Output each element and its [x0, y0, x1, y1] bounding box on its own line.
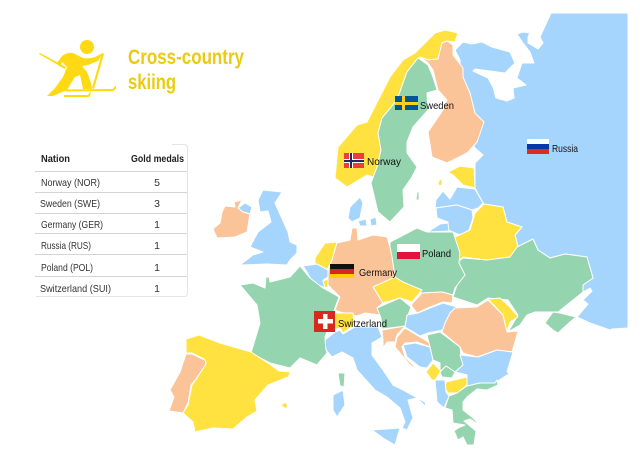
Luxembourg: [323, 279, 328, 288]
white band behind Switzerland label: [353, 316, 383, 327]
table rows: 5: [154, 177, 160, 189]
flag and label: Sweden: [395, 96, 454, 112]
Zealand: [370, 217, 377, 226]
Belarus: [455, 204, 522, 262]
table header: Gold medals: [131, 154, 184, 165]
title: Cross-country: [128, 46, 244, 69]
flag and label: Sweden: Sweden: [420, 100, 454, 112]
Estonia: [448, 166, 475, 188]
table rows: Sweden (SWE): [40, 198, 100, 210]
Switzerland: [330, 313, 354, 333]
Kaliningrad: [428, 223, 449, 232]
Portugal: [169, 354, 206, 413]
Kosovo: [440, 366, 455, 378]
flag and label: Switzerland: Switzerland: [338, 318, 387, 330]
Montenegro: [426, 363, 441, 380]
table rows: Poland (POL): [41, 262, 93, 274]
flag and label: Russia: [527, 139, 578, 155]
Sardinia: [333, 390, 345, 417]
flag and label: Poland: [397, 244, 451, 260]
Greece: [445, 380, 498, 445]
Slovenia: [382, 326, 405, 348]
table panel shadow: [36, 144, 188, 296]
Ireland: [213, 200, 250, 238]
Northern Ireland: [238, 203, 252, 214]
flag and label: Switzerland: [314, 311, 387, 332]
Spain: [183, 335, 291, 432]
flag and label: Germany: Germany: [359, 267, 398, 279]
medal table: [35, 144, 188, 296]
Lithuania: [436, 205, 473, 235]
table rows: 1: [154, 262, 160, 274]
title: skiing: [128, 71, 176, 94]
icon: cross-country skier: [39, 40, 116, 97]
Macedonia: [445, 377, 467, 393]
flag and label: Norway: [344, 153, 402, 168]
Austria: [377, 298, 411, 329]
Russia: [455, 13, 628, 330]
table rows: 1: [154, 219, 160, 231]
Balearic Islands: [281, 402, 288, 408]
Gotland: [416, 192, 419, 200]
Romania: [442, 300, 518, 357]
table rows: 1: [154, 240, 160, 252]
France: [240, 266, 339, 368]
table rows: Germany (GER): [41, 219, 103, 231]
table rows: 3: [154, 198, 160, 210]
Albania: [435, 380, 449, 408]
Poland: [390, 228, 465, 295]
table header: [41, 154, 184, 165]
title: [128, 46, 244, 94]
table rows: Norway (NOR): [41, 177, 100, 189]
Danish islands: [358, 219, 367, 226]
table rows: [40, 177, 160, 295]
table rows: Switzerland (SUI): [40, 283, 111, 295]
Hungary: [405, 303, 457, 336]
Latvia: [435, 187, 483, 210]
Netherlands: [315, 242, 337, 270]
Ukraine: [453, 239, 593, 332]
Slovakia: [411, 292, 453, 313]
flag and label: Germany: [330, 264, 398, 279]
Crimea: [545, 312, 576, 333]
flag and label: Norway: Norway: [367, 156, 402, 168]
Germany: [328, 228, 395, 316]
flag and label: Poland: Poland: [422, 248, 451, 260]
flag and label: Russia: Russia: [552, 143, 578, 155]
Sicily: [372, 428, 400, 445]
table rows: 1: [154, 283, 160, 295]
Denmark: [348, 197, 363, 222]
Moldova: [488, 298, 518, 332]
map of Europe: [169, 13, 628, 445]
Sweden: [371, 58, 437, 222]
Czech Republic: [373, 277, 422, 303]
table header: Nation: [41, 154, 70, 165]
Belgium: [303, 264, 328, 288]
table rows: Russia (RUS): [41, 240, 91, 252]
Serbia: [427, 332, 465, 373]
Bulgaria: [455, 350, 513, 386]
Estonian islands: [438, 178, 442, 186]
Corsica: [338, 373, 345, 387]
Italy: [325, 327, 426, 430]
Finland: [420, 41, 484, 163]
Norway: [335, 30, 458, 187]
Great Britain: [240, 190, 297, 265]
Croatia: [395, 328, 430, 375]
Bosnia: [403, 343, 433, 368]
